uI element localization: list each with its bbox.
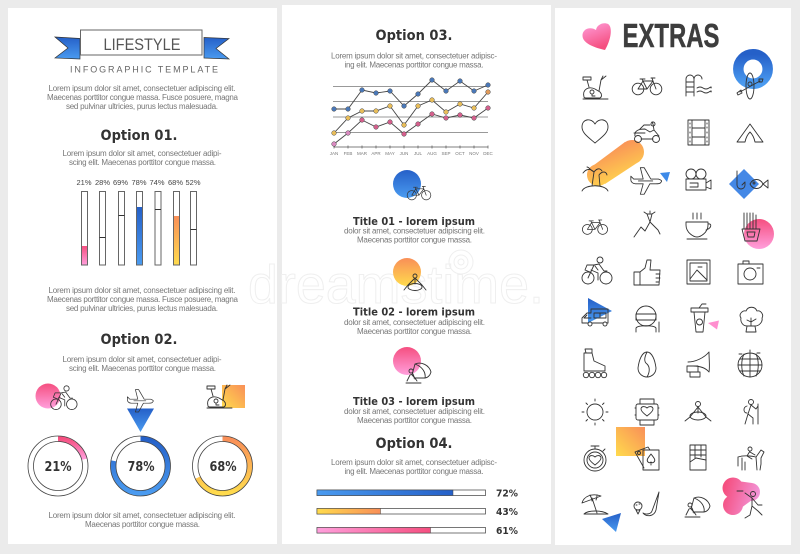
title 02 text: dolor sit amet, consectetuer adipiscing elit. — [344, 318, 485, 327]
title 01: Title 01 - lorem ipsum — [353, 215, 475, 228]
icon: frisbee thrower — [737, 491, 762, 518]
series pink points — [332, 106, 490, 146]
bar labels: 28% — [95, 178, 110, 187]
icon: chocolate bar — [690, 445, 706, 470]
decor: blue diamond — [729, 169, 759, 199]
decor: orange blob — [587, 140, 644, 186]
bar fills — [82, 207, 180, 265]
footer text left — [48, 511, 236, 529]
icon: cyclist — [582, 257, 612, 284]
title 01 text — [344, 226, 485, 244]
icon: horse rider — [738, 447, 764, 470]
icon: kite surfer — [685, 497, 710, 517]
bar labels: 69% — [113, 178, 128, 187]
option 02 text — [62, 355, 222, 373]
icon: small bicycle — [582, 220, 608, 234]
month labels: MAY — [385, 151, 395, 156]
text below bars: Lorem ipsum dolor sit amet, consectetuer adipiscing elit. — [48, 286, 236, 295]
icon: cyclist on pink circle — [36, 384, 77, 410]
grid lines — [333, 86, 488, 132]
decor: orange square — [616, 427, 645, 456]
donut: 68% — [192, 436, 252, 496]
donut: 78% — [110, 436, 170, 496]
icon: picture frame — [687, 260, 710, 284]
bar: 72%: 72% — [496, 488, 518, 500]
option 03 text — [331, 52, 497, 70]
icon: fries — [742, 213, 760, 241]
icon: thumbs up — [634, 260, 660, 285]
icon: pool ladder — [686, 75, 711, 96]
icon: pink heart — [582, 23, 611, 50]
month labels: AUG — [427, 151, 437, 156]
option 01 text: Lorem ipsum dolor sit amet, consectetuer adipi- — [62, 149, 222, 158]
icon: vr head — [636, 306, 659, 332]
intro text: Maecenas porttitor congue massa. Fusce posuere, magna — [47, 93, 239, 102]
watermark: dreamstime. — [248, 255, 544, 315]
icon: roller skate — [583, 349, 607, 378]
icon: avocado — [638, 352, 656, 377]
decor: blue triangle by camper — [588, 298, 612, 323]
intro text: sed pulvinar ultricies, purus lectus malesuada. — [66, 102, 218, 111]
text below bars — [47, 286, 239, 313]
donut: 21% — [28, 436, 88, 496]
icon: sun — [582, 399, 608, 425]
bar: 72% — [317, 488, 518, 500]
title 03 text — [344, 407, 485, 425]
donut: 78%: 78% — [128, 459, 155, 475]
series lines — [334, 80, 488, 144]
month labels: NOV — [469, 151, 479, 156]
icon: golf club — [634, 492, 659, 516]
title 03 text: dolor sit amet, consectetuer adipiscing elit. — [344, 407, 485, 416]
title 03: Title 03 - lorem ipsum — [353, 395, 475, 408]
icon: camper van — [582, 309, 608, 326]
month labels: DEC — [483, 151, 493, 156]
title 01 text: Maecenas porttitor congue massa. — [357, 236, 472, 244]
icon: kayak person on orange circle — [393, 258, 426, 290]
option 02 text: Lorem ipsum dolor sit amet, consectetuer adipi- — [62, 355, 222, 364]
icon: exercise bike — [583, 76, 608, 99]
bar labels — [76, 178, 201, 187]
banner: lifestyle — [55, 30, 229, 59]
title 02 text: Maecenas porttitor congue massa. — [357, 327, 472, 336]
icon: beach umbrella — [582, 495, 608, 514]
icon: plane on blue triangle — [127, 390, 154, 432]
icon: kayak — [737, 73, 763, 99]
icon: camera — [738, 261, 763, 284]
bar labels: 74% — [149, 178, 165, 187]
bar: 61%: 61% — [496, 526, 518, 537]
month labels — [330, 151, 493, 156]
icon: disco globe — [738, 350, 762, 377]
heading: option 01: Option 01. — [100, 128, 178, 144]
footer text left: Maecenas porttitor congue massa. — [85, 520, 200, 529]
bar: 43% — [317, 507, 518, 518]
month labels: SEP — [441, 151, 451, 156]
heading: option 03: Option 03. — [376, 28, 452, 44]
icon: volcano — [634, 211, 660, 237]
icon: fish and hook — [737, 171, 768, 189]
icon: plane — [631, 168, 662, 194]
month labels: JUL — [414, 151, 422, 156]
intro text: Lorem ipsum dolor sit amet, consectetuer adipiscing elit. — [48, 84, 236, 93]
text below bars: sed pulvinar ultricies, purus lectus malesuada. — [66, 304, 218, 313]
title 01 text: dolor sit amet, consectetuer adipiscing elit. — [344, 226, 485, 236]
donut: 21%: 21% — [44, 459, 72, 475]
decor: blue triangle by plane — [660, 172, 670, 182]
month labels: FEB — [344, 151, 352, 156]
month labels: JAN — [330, 151, 338, 156]
panel: left — [8, 8, 277, 544]
icon grid — [582, 73, 768, 518]
bar labels: 21% — [76, 178, 92, 187]
title 03 text: Maecenas porttitor congue massa. — [357, 416, 472, 425]
icon: gramophone — [687, 352, 709, 377]
icon: island — [582, 167, 608, 191]
option 01 text: scing elit. Maecenas porttitor congue massa. — [69, 158, 216, 167]
decor: pink triangle — [708, 320, 719, 330]
title 02 text — [344, 318, 485, 336]
donut: 68%: 68% — [210, 459, 237, 475]
icon: tent — [737, 124, 763, 142]
decor: pink circle — [744, 219, 774, 249]
bar labels: 68% — [168, 178, 183, 187]
decor: blue ring — [738, 54, 768, 84]
option 01 text — [62, 149, 222, 167]
axis — [334, 146, 488, 148]
heading: option 04: Option 04. — [376, 436, 452, 452]
series yellow points — [332, 90, 490, 135]
decor: pink blob — [722, 478, 760, 515]
icon: hiker — [744, 400, 758, 424]
option 04 text: ing elit. Maecenas porttitor congue massa. — [344, 467, 484, 476]
series blue points — [332, 78, 490, 111]
icon: kite surfer on pink circle — [393, 347, 431, 383]
intro text — [47, 84, 239, 111]
footer text left: Lorem ipsum dolor sit amet, consectetuer adipiscing elit. — [48, 511, 236, 520]
icon: heart — [582, 120, 608, 143]
heading: option 02: Option 02. — [100, 332, 178, 348]
option 02 text: scing elit. Maecenas porttitor congue massa. — [69, 364, 216, 373]
bar labels: 78% — [131, 178, 147, 187]
icon: scooter — [634, 122, 660, 142]
option 03 text: ing elit. Maecenas porttitor congue massa. — [344, 60, 484, 70]
icon: playing cards — [635, 447, 659, 470]
panel: middle — [282, 5, 551, 544]
bar: 43%: 43% — [496, 507, 518, 518]
bar labels: 52% — [185, 178, 201, 187]
icon: exercise bike on orange square — [207, 385, 245, 408]
chart: vertical bars — [76, 178, 201, 265]
icon: broccoli — [740, 307, 763, 332]
text below bars: Maecenas porttitor congue massa. Fusce posuere, magna — [47, 295, 239, 304]
icon: kayak person — [685, 402, 711, 421]
month labels: APR — [371, 151, 381, 156]
bar: 61% — [317, 526, 518, 537]
option 03 text: Lorem ipsum dolor sit amet, consectetuer adipisc- — [331, 52, 497, 60]
option 04 text — [331, 458, 497, 476]
icon: bicycle — [632, 78, 662, 95]
icon: coffee cup — [686, 213, 711, 239]
month labels: OCT — [455, 151, 465, 156]
icon: bicycle on blue circle — [393, 170, 431, 200]
subtitle: INFOGRAPHIC TEMPLATE — [70, 64, 218, 74]
heading: extras: EXTRAS — [622, 17, 720, 54]
month labels: MAR — [357, 151, 368, 156]
icon: film strip — [688, 120, 709, 145]
title 02: Title 02 - lorem ipsum — [353, 306, 475, 318]
option 04 text: Lorem ipsum dolor sit amet, consectetuer adipisc- — [331, 458, 497, 467]
decor: blue triangle by beach — [602, 513, 621, 532]
icon: coffee to go — [691, 304, 708, 332]
icon: movie camera — [686, 169, 711, 190]
bar outlines — [82, 192, 196, 265]
icon: stopwatch heart — [584, 446, 606, 471]
month labels: JUN — [400, 151, 408, 156]
banner: lifestyle: LIFESTYLE — [104, 35, 180, 54]
line chart — [330, 78, 493, 156]
panel: extras — [555, 8, 791, 545]
icon: smartwatch — [635, 399, 659, 425]
